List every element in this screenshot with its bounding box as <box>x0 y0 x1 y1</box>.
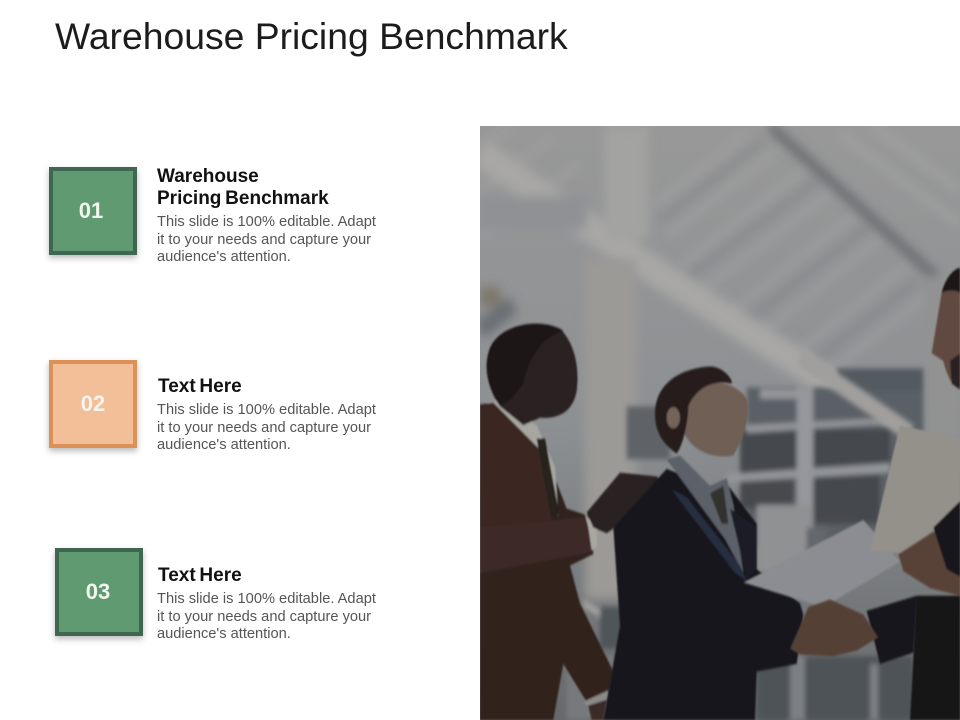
text 01 <box>157 214 376 265</box>
heading 01 <box>157 166 329 209</box>
diagonal beam over windows <box>800 357 910 433</box>
lower building and railing <box>567 600 913 720</box>
roof beams <box>480 126 940 388</box>
text 03: audience's attention. <box>157 626 291 642</box>
left man <box>480 323 670 720</box>
text 01: This slide is 100% editable. Adapt <box>157 214 376 230</box>
text 01: audience's attention. <box>157 249 291 265</box>
ceiling slats <box>480 126 960 384</box>
text 03: it to your needs and capture your <box>157 608 371 624</box>
middle man <box>603 367 803 720</box>
text 02: it to your needs and capture your <box>157 420 371 436</box>
text 03: This slide is 100% editable. Adapt <box>157 591 376 607</box>
handshake <box>790 600 878 656</box>
text 02 <box>157 402 376 453</box>
windows <box>627 368 923 573</box>
badge 03: 03 <box>86 579 110 604</box>
heading 03: Text Here <box>158 565 242 586</box>
badge 02: 02 <box>81 391 105 416</box>
text 01: it to your needs and capture your <box>157 232 371 248</box>
title: Warehouse Pricing Benchmark <box>55 15 568 57</box>
badge 01 <box>49 167 137 255</box>
badge 02 <box>49 360 137 448</box>
photo: business handshake <box>480 126 960 720</box>
badge 03 <box>55 548 143 636</box>
pillars <box>585 259 637 600</box>
text 02: This slide is 100% editable. Adapt <box>157 402 376 418</box>
right man and document <box>743 268 960 720</box>
heading 01: Pricing Benchmark <box>157 188 329 209</box>
text 02: audience's attention. <box>157 437 291 453</box>
heading 02: Text Here <box>158 376 242 397</box>
text 03 <box>157 591 376 642</box>
heading 01: Warehouse <box>157 166 259 187</box>
badge 01: 01 <box>79 198 103 223</box>
